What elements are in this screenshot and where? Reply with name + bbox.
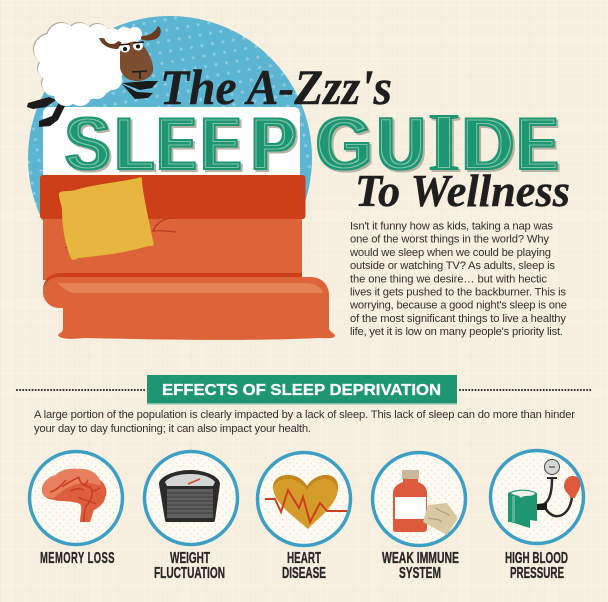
icon: blood pressure cuff [508,460,580,528]
title: SLEEP: P [251,102,296,187]
sheep wool [34,23,142,106]
pillow [59,177,154,260]
intro paragraph: would we sleep when we could be playing [349,247,551,259]
label: SYSTEM [399,565,441,582]
title: GUIDE: G [316,102,372,187]
intro paragraph: one of the worst things in the world? Why [350,234,549,246]
section description: A large portion of the population is clearly impacted by a lack of sleep. This lack of sleep can do more than hinder [34,409,575,421]
icon: tissue [423,503,458,535]
section divider: right dots [460,389,591,391]
title: To Wellness: To Wellness [355,165,570,216]
blue dotted circle [28,16,312,300]
title: SLEEP: E [201,102,241,187]
intro paragraph: the one thing we desire… but with hectic [350,273,547,285]
illustration: sofa [40,175,335,340]
section banner: EFFECTS OF SLEEP DEPRIVATION [162,382,441,399]
label: FLUCTUATION [154,565,225,582]
icon: scale [159,470,220,522]
label [154,550,225,582]
effect: memory loss [30,452,122,567]
title: SLEEP: E [157,102,196,187]
label [382,550,459,582]
label: HEART [287,550,321,567]
title: GUIDE: E [517,102,558,187]
sheep ears [99,38,122,49]
effect: weak immune system [372,452,466,582]
section description [34,409,575,435]
label: PRESSURE [510,565,564,582]
effect: weight fluctuation [144,452,238,582]
intro paragraph: worrying, because a good night's sleep is one [349,300,567,312]
label [505,550,568,582]
intro paragraph: life, yet it is low on many people's priority list. [350,326,563,338]
effect: heart disease [258,452,350,582]
icon: brain [42,469,106,522]
effect: high blood pressure [490,450,584,582]
sheep head [120,41,153,81]
title: SLEEP: L [115,102,154,187]
section banner [147,375,457,404]
intro paragraph [349,220,567,338]
label: WEAK IMMUNE [382,550,459,567]
section description: your day to day functioning; it can also impact your health. [34,423,311,435]
sheep face [119,42,147,79]
sheep tuft [104,27,142,44]
label: WEIGHT [170,550,210,567]
label: DISEASE [282,565,326,582]
label [282,550,326,582]
intro paragraph: lives it gets pushed to the backburner. This is [350,286,566,298]
title: GUIDE: D [462,102,514,187]
illustration: sheep [27,23,161,127]
intro paragraph: outside or watching TV? As adults, sleep is [350,260,555,272]
label: HIGH BLOOD [505,550,568,567]
title: The A-Zzz's: The A-Zzz's [160,59,392,115]
title: GUIDE: U [377,102,425,187]
label: MEMORY LOSS [40,550,115,567]
white title panel [43,107,300,182]
icon: pill bottle [393,470,427,532]
intro paragraph: of the most significant things to live a healthy [350,313,566,325]
sheep legs [27,81,158,127]
section divider: left dots [17,389,145,391]
icon: heart [265,475,347,529]
title: GUIDE: I [429,96,459,189]
intro paragraph: Isn't it funny how as kids, taking a nap was [350,220,553,232]
title: SLEEP: S [65,102,110,187]
